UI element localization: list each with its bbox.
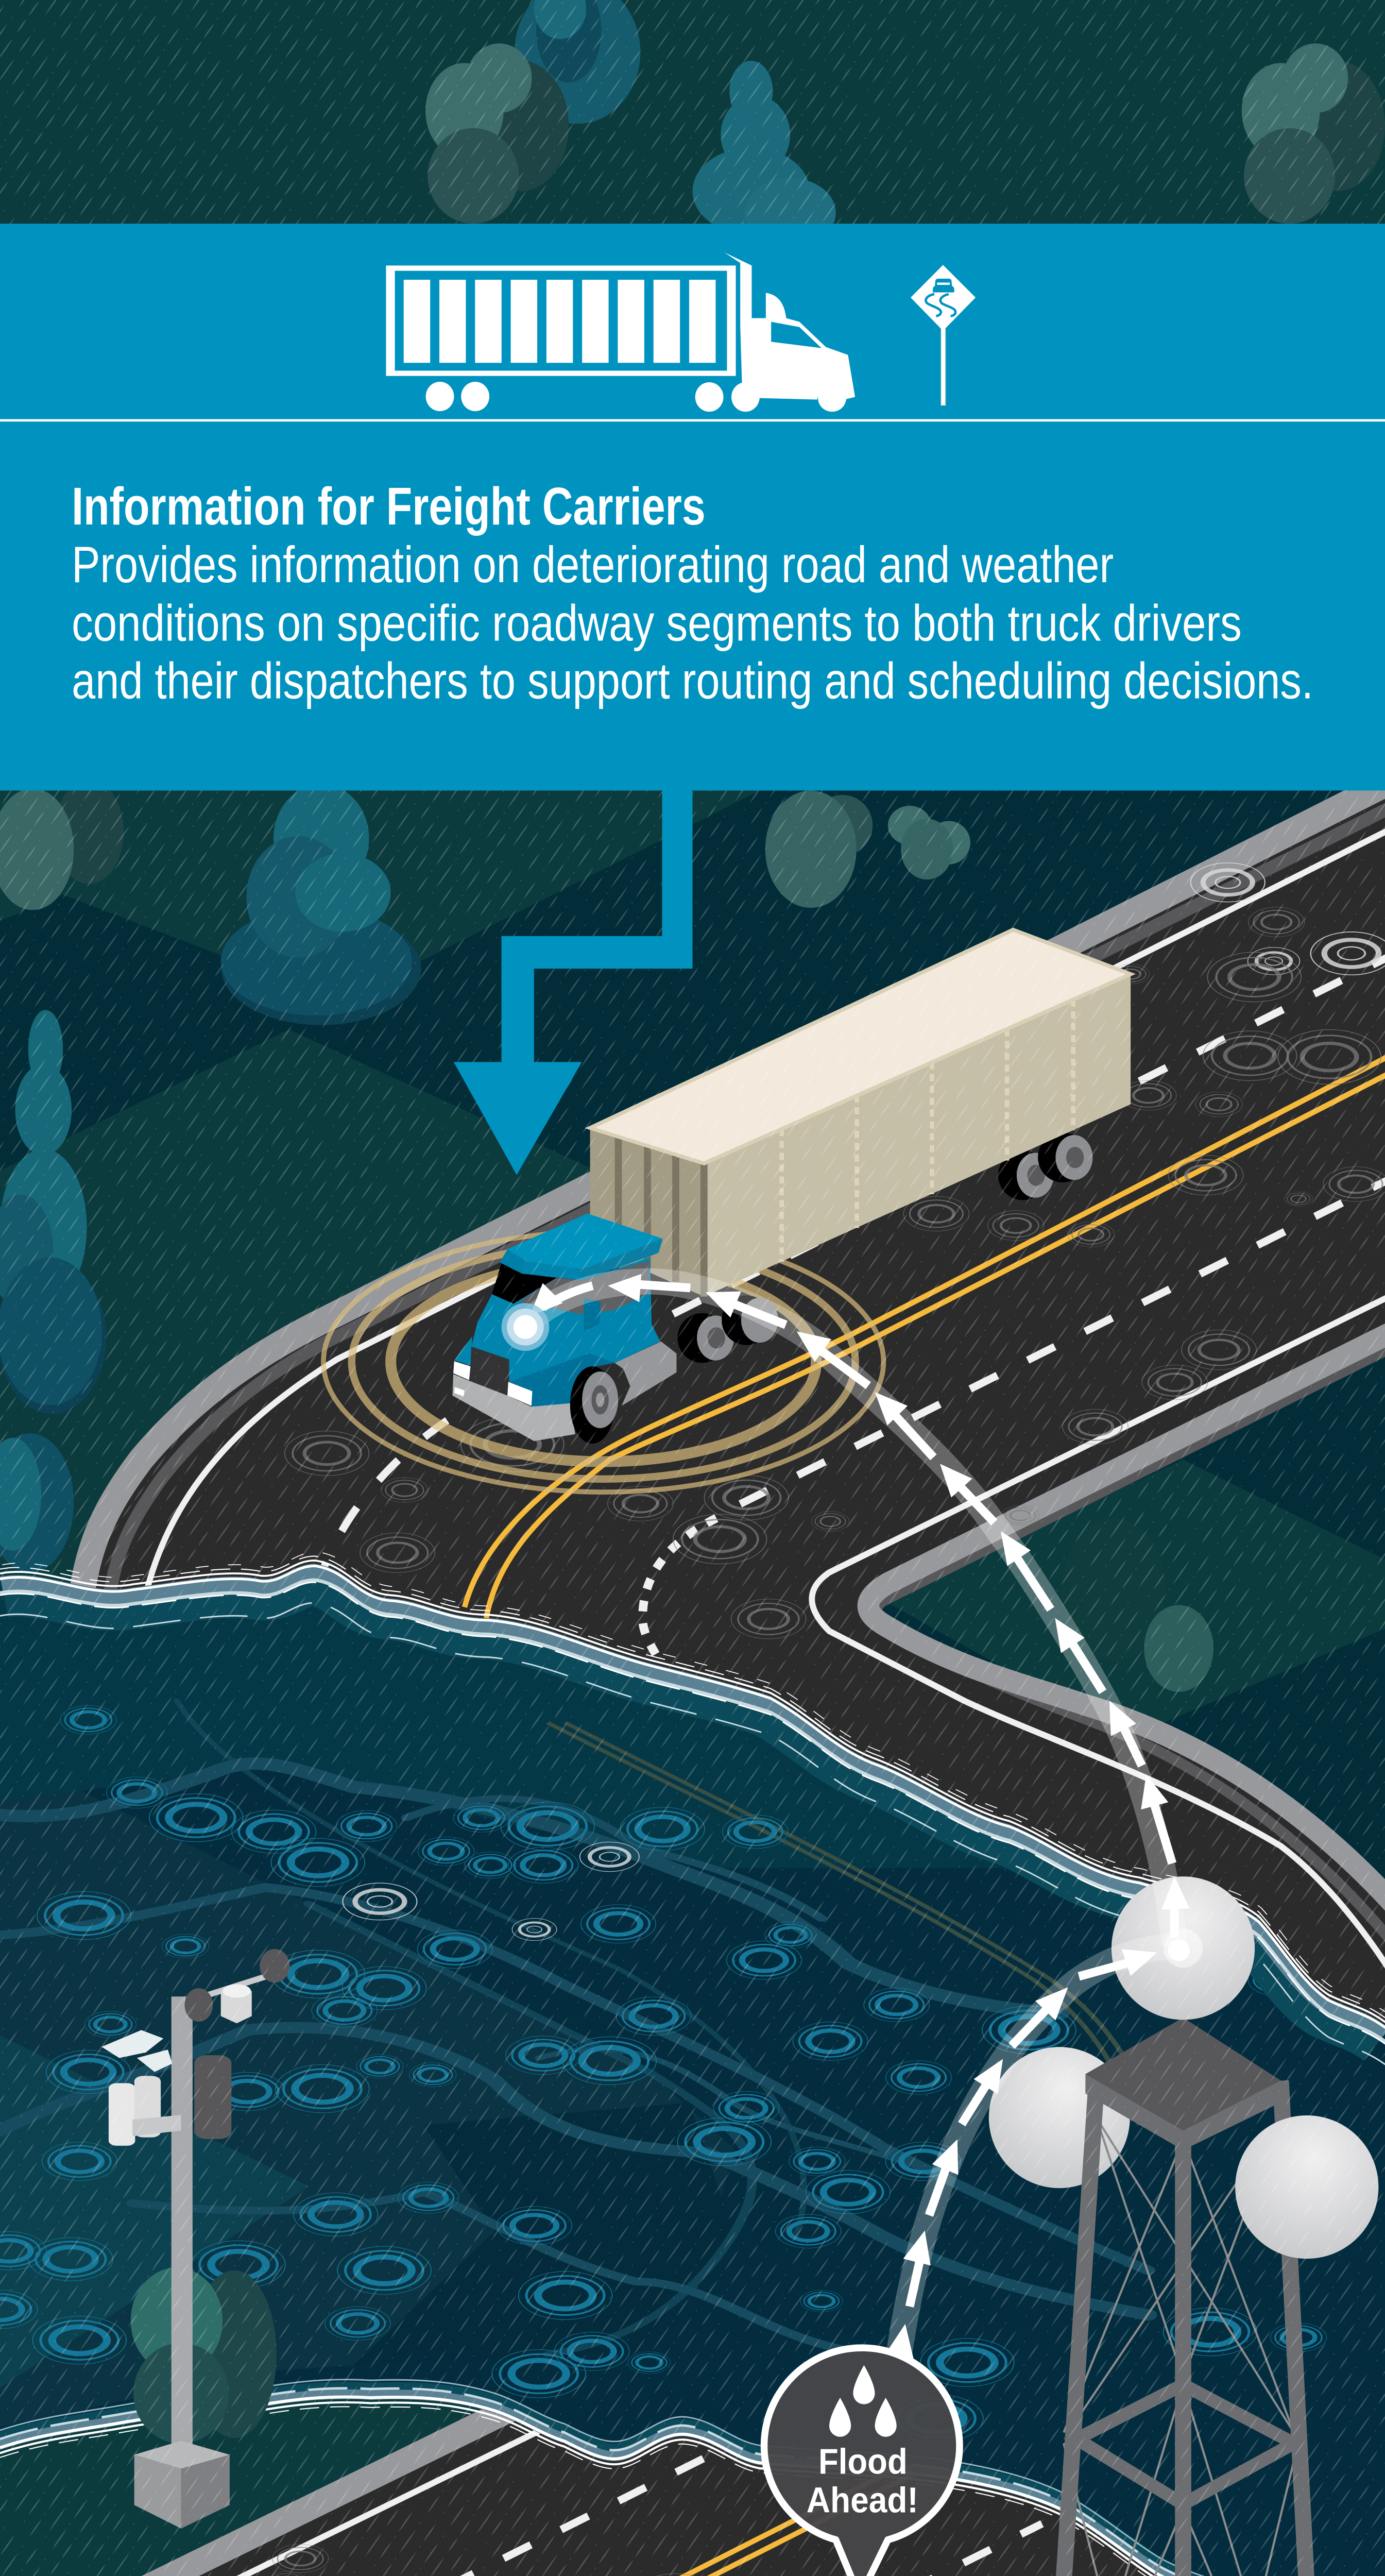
- trees: top row: [425, 0, 1385, 248]
- right dish: [1235, 2115, 1378, 2259]
- headlights: [453, 1361, 532, 1406]
- arrow path band: [899, 1946, 1174, 2357]
- truck wheels: [426, 382, 846, 412]
- cab window: [771, 322, 822, 348]
- sign post: [941, 326, 946, 405]
- lower road: lane markings: [0, 2376, 1385, 2576]
- lower road: shoulders: [0, 2326, 651, 2576]
- tree behind weather station: [131, 2267, 277, 2444]
- trailer front stripes: [618, 1137, 704, 1297]
- skidding car glyph: [926, 279, 955, 316]
- solar sensors: [101, 2030, 172, 2072]
- arrow heads: [886, 1939, 1161, 2359]
- water edge: lower shoreline: [0, 2380, 1385, 2576]
- pole: [172, 1996, 193, 2449]
- tractor rear wheels: [677, 1295, 778, 1363]
- bubble text: Flood: Flood: [818, 2442, 908, 2482]
- lower road: bottom shoulder: [0, 2459, 1385, 2576]
- anemometer: [184, 1949, 290, 2023]
- arrow heads: [520, 1272, 1190, 1909]
- water: submerged road traces: [0, 1700, 1148, 2354]
- left dish: [989, 2047, 1130, 2188]
- lower road: rain ripples: [0, 2545, 718, 2576]
- top dish: [1112, 1876, 1255, 2020]
- arrow dashes: [910, 1959, 1142, 2307]
- trailer outline: [390, 268, 731, 374]
- cab rear window band: [519, 1261, 649, 1314]
- tower signal glow: [1164, 1928, 1203, 1968]
- upper road markings: [145, 819, 1385, 1987]
- communications tower: [989, 1876, 1378, 2576]
- front bumper: [452, 1374, 575, 1441]
- trailer side ribs: [782, 999, 1073, 1262]
- water: rain ripples: [0, 1705, 1327, 2451]
- upper road asphalt: [80, 760, 1385, 2172]
- signal rings: tractor trailer: [323, 1231, 883, 1492]
- band divider line: [0, 419, 1385, 421]
- tower top pyramid: [1085, 2018, 1281, 2130]
- lower land: verge below road: [0, 2493, 1385, 2576]
- fuel tank: [614, 1342, 677, 1406]
- trailer roof: [590, 930, 1131, 1163]
- sensor stack: [109, 2076, 181, 2146]
- icon: freight truck: [390, 252, 855, 412]
- flood alert bubble: [764, 2348, 960, 2576]
- arrow: information band to truck: [454, 790, 692, 1175]
- lower land: left verge: [0, 2367, 565, 2576]
- arrow path: tower to truck: [520, 1272, 1190, 1946]
- tower legs: [1047, 2081, 1320, 2576]
- trailer: [590, 930, 1131, 1363]
- tractor cab: [724, 252, 855, 400]
- cab signal glow: [502, 1303, 549, 1351]
- upper road rain ripples: [285, 863, 1385, 1639]
- water edge: upper shoreline: [0, 1564, 1385, 2067]
- logger box: [194, 2055, 231, 2139]
- trailer rear wheels: [998, 1132, 1092, 1200]
- tower platform: [1085, 2018, 1281, 2150]
- water edge: foam on lower road: [0, 2402, 1385, 2576]
- arrow path band: [525, 1281, 1174, 1946]
- tower bracing: [1051, 2117, 1315, 2576]
- flood water: [0, 1564, 1385, 2439]
- trailer side face: [704, 974, 1131, 1297]
- windshield: [492, 1263, 556, 1303]
- lower road: asphalt: [0, 1972, 1385, 2576]
- concrete base: [134, 2441, 230, 2529]
- cab side door: [584, 1298, 601, 1331]
- truck cab: [452, 1213, 677, 1444]
- cab left panel: [454, 1336, 472, 1365]
- cab body: [471, 1257, 660, 1406]
- trailer slats: [404, 280, 715, 363]
- water drops: [829, 2365, 897, 2437]
- lower land: dark hill shadow: [1192, 2493, 1385, 2576]
- front wheel: [570, 1366, 618, 1444]
- trees: middle row: [0, 779, 1213, 1692]
- grille: [470, 1347, 509, 1396]
- icon: slippery road sign: [911, 265, 976, 405]
- cab roof fairing: [500, 1213, 663, 1280]
- upper road shoulders: [80, 760, 1385, 1944]
- water edge: foam on upper road: [0, 1552, 1385, 2025]
- arrow path: flood alert to tower: [886, 1939, 1174, 2359]
- blue information band: [0, 224, 1385, 790]
- lower land and road: [0, 1972, 1385, 2576]
- bubble text: Ahead!: Ahead!: [807, 2480, 918, 2520]
- trailer front face: [590, 1128, 704, 1297]
- arrow dashes: [543, 1283, 1174, 1937]
- bubble outline: [764, 2348, 960, 2576]
- water: submerged terrain shades: [0, 1521, 1327, 2451]
- cab lower panel: [509, 1353, 614, 1406]
- water: submerged yellow road lines: [548, 1723, 1157, 2125]
- weather station: [101, 1949, 290, 2529]
- heading: Information for Freight Carriers: Information for Freight Carriers: [72, 477, 706, 536]
- description text: Provides information on deteriorating road and weather: [72, 536, 1114, 594]
- tower cross braces: [1077, 2385, 1294, 2504]
- sign diamond: [911, 265, 976, 331]
